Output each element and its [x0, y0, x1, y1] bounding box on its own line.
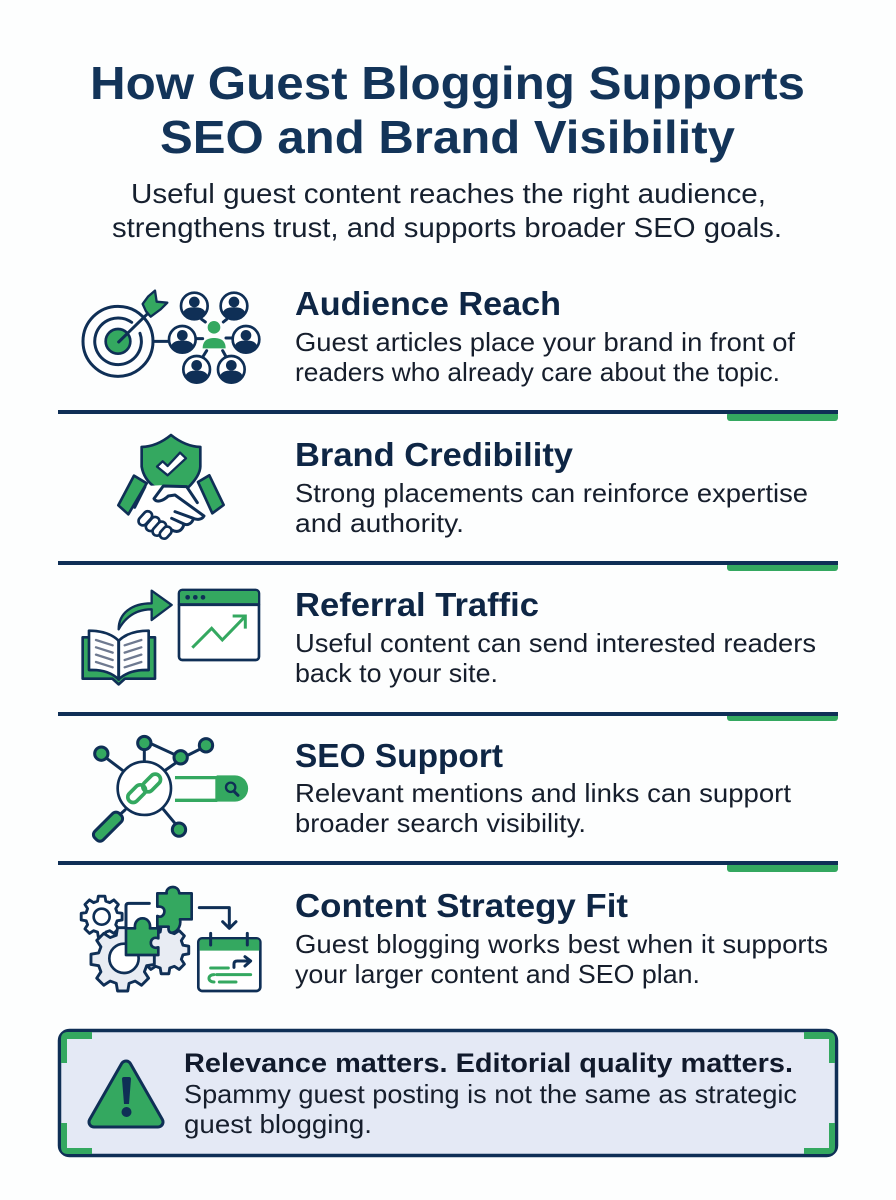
callout text: Relevance matters. Editorial quality matters. [184, 1048, 793, 1078]
callout text: Spammy guest posting is not the same as strategic [184, 1079, 797, 1109]
panel: seo support [91, 736, 792, 843]
panel: audience reach [83, 285, 796, 387]
subtitle: strengthens trust, and supports broader SEO goals. [112, 212, 782, 243]
text: seo support body: Relevant mentions and links can support [295, 778, 792, 808]
heading: brand credibility: Brand Credibility [295, 436, 574, 473]
text: brand credibility body: Strong placements can reinforce expertise [295, 478, 808, 508]
panel: referral traffic [83, 586, 816, 688]
text: content strategy fit body [295, 929, 828, 989]
icon: book, arrow and analytics window [83, 590, 259, 684]
callout text [184, 1048, 797, 1139]
heading: content strategy fit: Content Strategy Fit [295, 887, 628, 924]
callout: relevance warning [60, 1030, 836, 1156]
icon: shield and handshake [118, 435, 224, 540]
text: referral traffic body [295, 628, 816, 688]
text: audience reach body: Guest articles place your brand in front of [295, 327, 796, 357]
callout text: guest blogging. [184, 1109, 372, 1139]
panel: brand credibility [118, 435, 808, 540]
icon: gears, puzzle and calendar [81, 887, 260, 991]
subtitle: Useful guest content reaches the right audience, [131, 178, 766, 209]
text: referral traffic body: Useful content can send interested readers [295, 628, 816, 658]
panel: content strategy fit [81, 887, 828, 991]
text: content strategy fit body: your larger content and SEO plan. [295, 959, 700, 989]
title: SEO and Brand Visibility [160, 111, 735, 163]
heading: audience reach: Audience Reach [295, 285, 561, 322]
text: audience reach body [295, 327, 796, 387]
title: How Guest Blogging Supports [90, 57, 805, 109]
text: brand credibility body [295, 478, 808, 538]
icon: warning triangle [94, 1066, 158, 1122]
heading: referral traffic: Referral Traffic [295, 586, 539, 623]
text: audience reach body: readers who already care about the topic. [295, 357, 780, 387]
subtitle [112, 178, 782, 243]
icon: link network and search bar [91, 736, 248, 843]
title [90, 57, 805, 163]
text: seo support body [295, 778, 792, 838]
text: seo support body: broader search visibility. [295, 808, 586, 838]
text: referral traffic body: back to your site. [295, 658, 498, 688]
heading: seo support: SEO Support [295, 737, 503, 774]
text: brand credibility body: and authority. [295, 508, 464, 538]
icon: target and audience network [83, 291, 259, 383]
text: content strategy fit body: Guest blogging works best when it supports [295, 929, 828, 959]
